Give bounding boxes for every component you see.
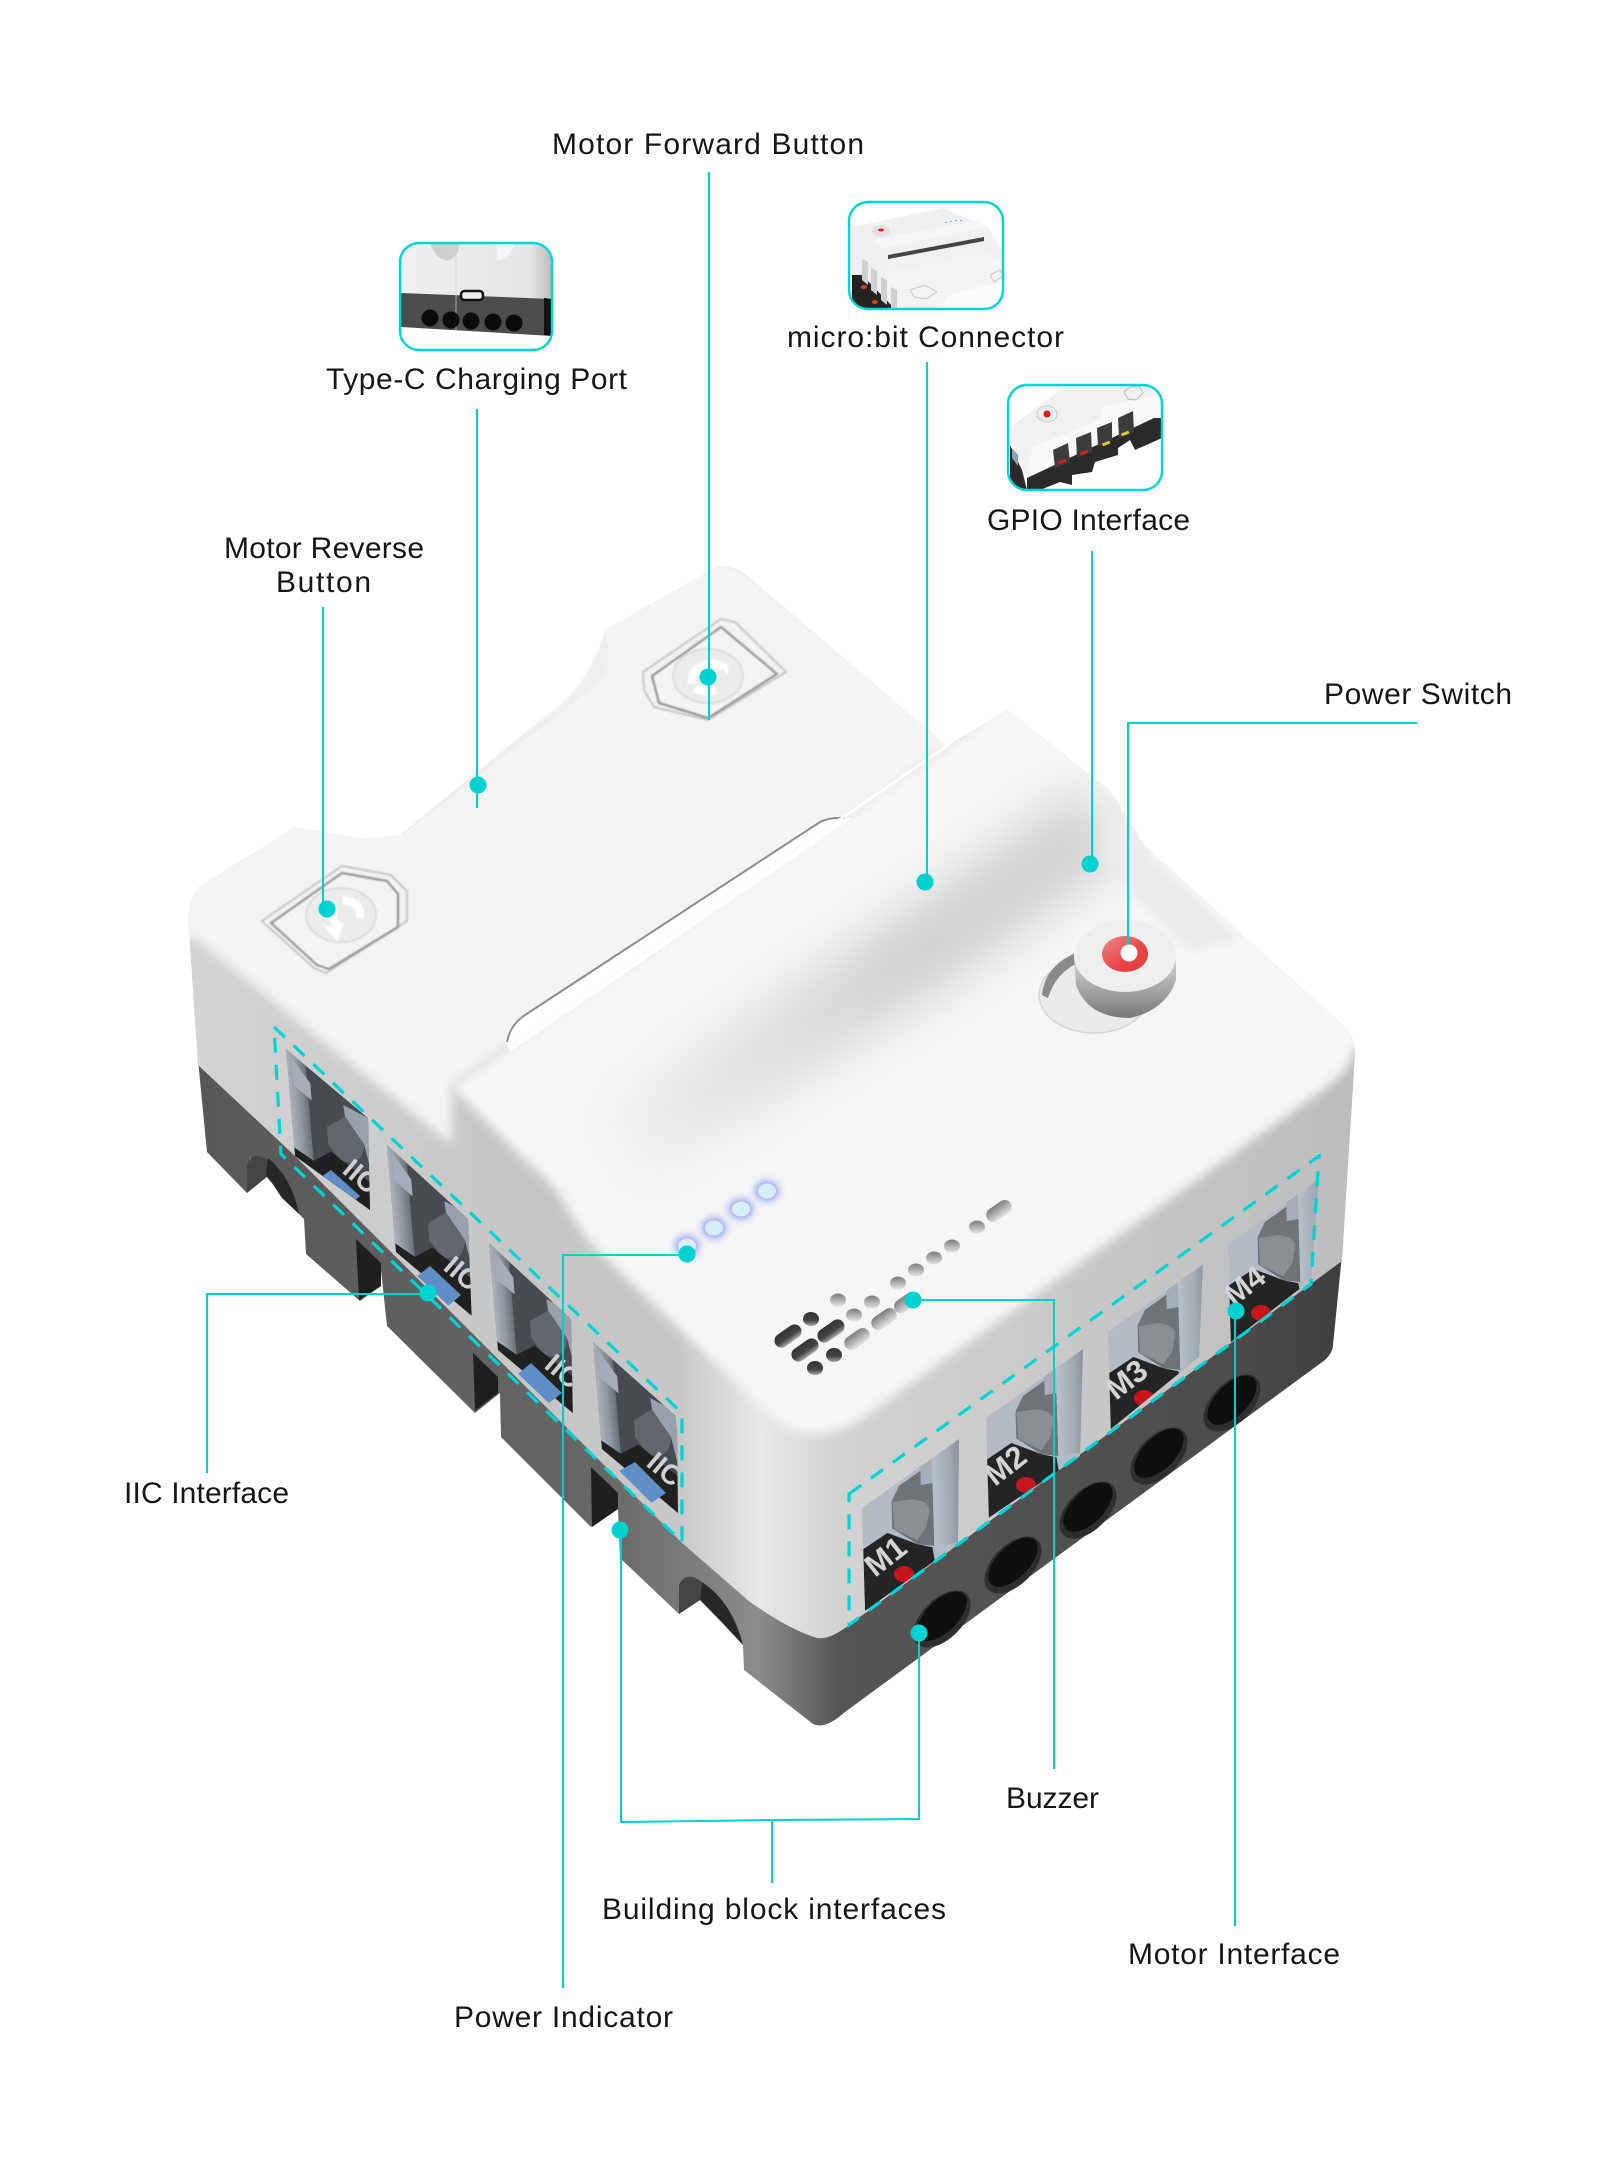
- callout: power switch: Power Switch: [1324, 678, 1512, 711]
- base silhouette: [198, 1060, 1342, 1726]
- motor port M3: [1107, 1264, 1203, 1430]
- callout: motor interface: [1128, 1302, 1340, 1971]
- thumbnail: micro:bit connector: [849, 202, 1003, 309]
- side faces: [180, 560, 1360, 1650]
- mounting arches: [247, 1156, 743, 1645]
- IIC port 4: IIC: [641, 1446, 688, 1493]
- thumbnail: type-C port: [400, 243, 552, 350]
- device: dark base: [198, 1060, 1342, 1726]
- callout: type-C charging port: [326, 243, 628, 808]
- building block holes: [903, 1364, 1271, 1658]
- motor port M4: [1225, 1182, 1318, 1342]
- IIC port 2: [387, 1145, 472, 1316]
- IIC ports: [286, 1049, 688, 1518]
- IIC port 1: IIC: [337, 1153, 384, 1200]
- callout: IIC interface: IIC Interface: [124, 1477, 289, 1510]
- power switch: [1039, 920, 1176, 1033]
- switch cap body: [1074, 956, 1176, 1018]
- callout: building block interfaces: Building block interfaces: [602, 1893, 946, 1926]
- callout: GPIO interface: GPIO Interface: [987, 504, 1190, 537]
- rear block ledge: [380, 632, 609, 836]
- callout: motor interface: Motor Interface: [1128, 1938, 1340, 1971]
- speaker grille: [772, 1197, 1014, 1375]
- motor port M1: [858, 1439, 962, 1611]
- callout: micro:bit connector: micro:bit Connector: [787, 321, 1064, 354]
- IIC port 4: [593, 1342, 678, 1513]
- red indicator: [1102, 936, 1148, 972]
- callout: type-C charging port: Type-C Charging Port: [326, 363, 628, 396]
- callout: power indicator: Power Indicator: [454, 2001, 673, 2034]
- slot between blocks: [507, 818, 852, 1052]
- IIC port 2: IIC: [438, 1250, 485, 1297]
- callout: motor reverse button: Motor Reverse: [224, 532, 424, 565]
- motor port M3: M3: [1099, 1352, 1154, 1407]
- callout: motor forward button: Motor Forward Button: [552, 128, 864, 161]
- callout: building block interfaces: [602, 1522, 946, 1926]
- callout: buzzer: Buzzer: [1006, 1782, 1099, 1815]
- callout: GPIO interface: [987, 385, 1190, 872]
- callout: motor forward button: [552, 128, 864, 720]
- motor port M2: [986, 1349, 1083, 1518]
- motor port M4: M4: [1217, 1258, 1273, 1313]
- slope near switch: [1104, 840, 1226, 944]
- power indicator LEDs: [675, 1181, 779, 1256]
- motor ports: [858, 1175, 1328, 1611]
- callout: motor reverse button: [224, 532, 424, 918]
- callout: buzzer: [904, 1292, 1099, 1815]
- callout: IIC interface: [124, 1284, 436, 1510]
- callout: micro:bit connector: [787, 202, 1064, 890]
- motor port M2: M2: [978, 1438, 1033, 1493]
- switch cap top: [1074, 920, 1176, 992]
- IIC port 1: [286, 1049, 370, 1210]
- device: white housing: [170, 550, 1370, 1650]
- IIC port 3: IIC: [539, 1348, 586, 1395]
- block ridge shadow: [620, 820, 1105, 1150]
- front block edge highlight: [838, 745, 948, 819]
- rear notch shadows: [356, 1239, 618, 1527]
- callout: motor reverse button: Button: [276, 566, 371, 599]
- front block top: [451, 700, 1370, 1434]
- callout: power switch: [1120, 678, 1512, 962]
- icon: motor reverse button: [262, 866, 407, 973]
- dashed box: motor interfaces: [849, 1156, 1319, 1625]
- switch recess: [1039, 957, 1149, 1033]
- callout: power indicator: [454, 1246, 696, 2034]
- dashed box: IIC interfaces: [274, 1027, 682, 1542]
- IIC port 3: [489, 1243, 573, 1413]
- thumbnail: GPIO interface: [1008, 385, 1162, 490]
- icon: motor forward button: [643, 619, 786, 720]
- motor port M1: M1: [858, 1529, 913, 1584]
- rear block top: [170, 550, 960, 1145]
